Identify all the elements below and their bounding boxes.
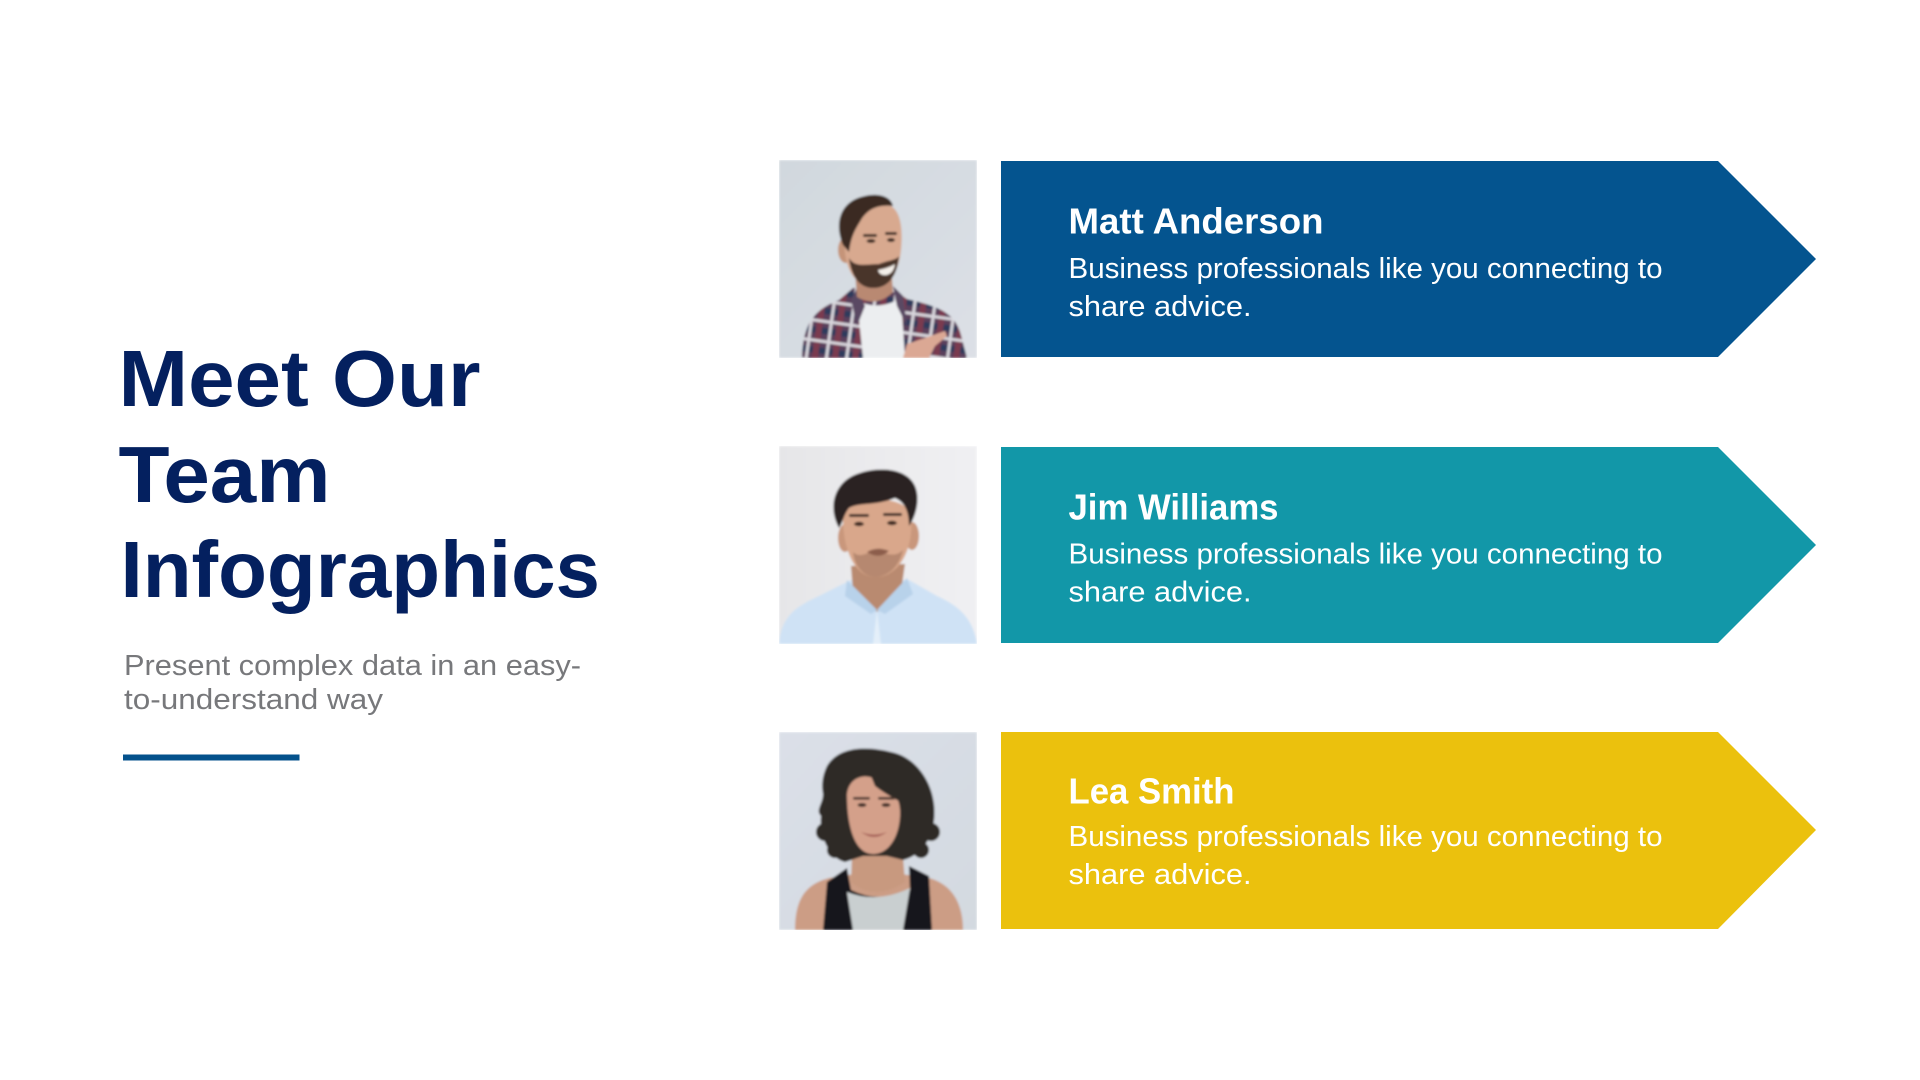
arrow panel: Jim Williams	[1001, 447, 1816, 643]
arrow panel: Lea Smith	[1001, 732, 1816, 929]
arrow panel: Matt Anderson: Matt Anderson	[1068, 200, 1324, 242]
arrow panel: Lea Smith: Business professionals like you connecting to	[1068, 821, 1662, 853]
subtitle: to-understand way	[124, 684, 384, 716]
arrow panel: Matt Anderson: share advice.	[1068, 291, 1252, 323]
arrow panel: Matt Anderson	[1001, 161, 1816, 357]
photo: Matt Anderson	[779, 160, 977, 358]
photo: Jim Williams	[779, 446, 977, 644]
arrow panel: Jim Williams: share advice.	[1068, 576, 1252, 608]
arrow panel: Lea Smith: Lea Smith	[1068, 770, 1234, 812]
arrow panel: Jim Williams: Jim Williams	[1068, 486, 1278, 528]
title: Infographics	[120, 525, 600, 614]
subtitle: Present complex data in an easy-	[124, 650, 581, 682]
title: Meet Our	[118, 334, 480, 423]
subtitle	[124, 650, 581, 716]
title: Team	[118, 430, 330, 519]
title	[118, 334, 600, 614]
accent rule	[123, 754, 300, 760]
arrow panel: Matt Anderson: Business professionals like you connecting to	[1068, 253, 1662, 285]
arrow panel: Lea Smith: share advice.	[1068, 859, 1252, 891]
arrow panel: Jim Williams: Business professionals like you connecting to	[1068, 538, 1662, 570]
photo: Lea Smith	[779, 732, 977, 930]
